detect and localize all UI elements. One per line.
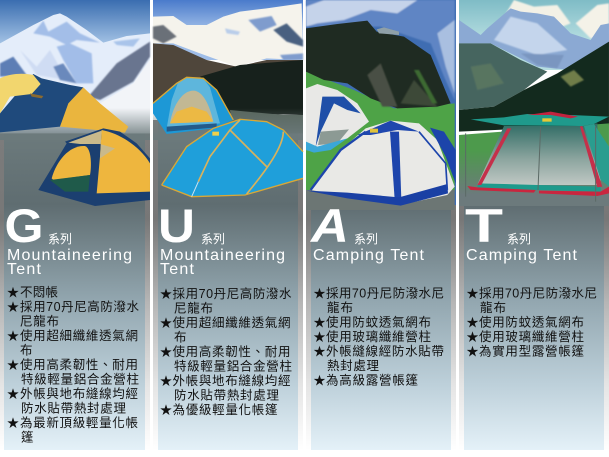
feature list: G series: ★ [7, 385, 19, 402]
feature list: T series: 使用玻璃纖維營柱 [479, 329, 584, 344]
feature list: A series: ★ [314, 372, 326, 388]
feature list: G series: 特級輕量鋁合金營柱 [21, 372, 139, 386]
feature list: A series: 熱封處理 [327, 359, 379, 373]
big letter T: T [465, 199, 503, 252]
feature list: T series: ★ [466, 342, 479, 360]
feature list: G series [7, 284, 139, 444]
heading: Mountaineering Tent: Mountaineering [7, 247, 132, 264]
feature list: A series: ★ [314, 314, 326, 330]
feature list: U series: 使用超細纖維透氣網 [172, 315, 290, 330]
photo: glacier mountain with blue tents [153, 0, 303, 197]
feature list: G series: 篷 [21, 430, 34, 444]
feature list: U series: ★ [160, 285, 172, 302]
label: series: 系列 [201, 232, 225, 246]
heading: Mountaineering Tent [7, 247, 132, 278]
label: series: 系列 [354, 232, 378, 246]
big letter U: U [158, 199, 195, 252]
feature list: T series: 為實用型露營帳篷 [479, 344, 584, 358]
feature list: G series: 使用高柔韌性、耐用 [20, 357, 138, 372]
feature list: U series [160, 285, 292, 418]
icon: blue tent rear [153, 77, 233, 134]
feature list: T series: 採用70丹尼防潑水尼 [479, 286, 597, 300]
icon: yellow dome tent [38, 128, 150, 206]
feature list: U series: ★ [160, 343, 172, 360]
icon: white tent front [307, 121, 456, 206]
feature list: U series: ★ [160, 372, 172, 389]
icon: teal screen tent [466, 112, 609, 202]
feature list: G series: ★ [7, 298, 19, 315]
feature list: G series: ★ [7, 414, 19, 431]
heading: Mountaineering Tent: Tent [7, 261, 42, 278]
panel: G series [0, 0, 150, 450]
feature list: T series: 龍布 [480, 300, 506, 315]
label: series: 系列 [48, 232, 72, 246]
feature list: U series: 布 [174, 330, 187, 344]
feature list: A series: ★ [314, 284, 326, 302]
feature list: U series: ★ [160, 401, 172, 418]
photo: cliff and meadow with white-blue tents [306, 0, 456, 210]
feature list: U series: 特級輕量鋁合金營柱 [174, 358, 292, 374]
feature list: G series: 尼龍布 [20, 314, 59, 328]
heading: Mountaineering Tent [160, 247, 285, 278]
feature list: T series: ★ [466, 314, 479, 330]
feature list: G series: 採用70丹尼高防潑水 [20, 299, 139, 314]
feature list: U series: 防水貼帶熱封處理 [174, 388, 279, 402]
feature list: A series: 為高級露營帳篷 [326, 372, 418, 388]
panel: A series [306, 0, 456, 450]
photo: alpine forest with teal screen tent [459, 0, 609, 206]
big letter G: G [4, 199, 44, 252]
panel: U series [153, 0, 303, 450]
feature list: U series: 採用70丹尼高防潑水 [172, 286, 292, 301]
feature list: G series: ★ [7, 356, 19, 373]
feature list: A series: 使用玻璃纖維營柱 [326, 329, 431, 344]
feature list: A series: 使用防蚊透氣網布 [326, 314, 431, 330]
feature list: G series: 使用超細纖維透氣網 [20, 328, 138, 343]
feature list: U series: 為優級輕量化帳篷 [172, 402, 278, 417]
icon: white tent rear [306, 84, 369, 153]
feature list: G series: 防水貼帶熱封處理 [21, 400, 126, 416]
icon: navy and yellow tent [0, 74, 128, 133]
feature list: T series: ★ [466, 328, 479, 345]
feature list: G series: 布 [20, 344, 33, 358]
feature list: G series: 外帳與地布縫線均經 [20, 386, 138, 401]
feature list: T series: ★ [466, 284, 479, 302]
heading: Camping Tent: Camping Tent [466, 247, 578, 264]
feature list: U series: ★ [160, 314, 172, 331]
icon: blue tent front [162, 119, 303, 197]
feature list: A series [314, 284, 444, 388]
feature list: A series: 外帳縫線經防水貼帶 [326, 344, 444, 358]
feature list: A series: ★ [314, 328, 326, 345]
feature list: T series: 使用防蚊透氣網布 [479, 314, 584, 330]
feature list: U series: 外帳與地布縫線均經 [172, 373, 290, 388]
label: series: 系列 [507, 232, 531, 246]
feature list: U series: 使用高柔韌性、耐用 [172, 344, 290, 359]
feature list: A series: 採用70丹尼防潑水尼 [326, 286, 444, 300]
feature list: G series: 不悶帳 [20, 286, 58, 300]
feature list: T series [466, 284, 597, 360]
feature list: G series: 為最新頂級輕量化帳 [20, 415, 138, 430]
big letter A: A [310, 199, 349, 252]
feature list: A series: ★ [314, 342, 326, 360]
feature list: U series: 尼龍布 [174, 300, 213, 316]
heading: Camping Tent: Camping Tent [313, 247, 425, 264]
photo: snowy mountain with yellow tents [0, 0, 150, 206]
heading: Mountaineering Tent: Mountaineering [160, 247, 285, 264]
heading: Mountaineering Tent: Tent [160, 261, 195, 278]
feature list: G series: ★ [7, 284, 19, 300]
feature list: A series: 龍布 [327, 300, 353, 315]
panel: T series [459, 0, 609, 450]
feature list: G series: ★ [7, 327, 19, 344]
